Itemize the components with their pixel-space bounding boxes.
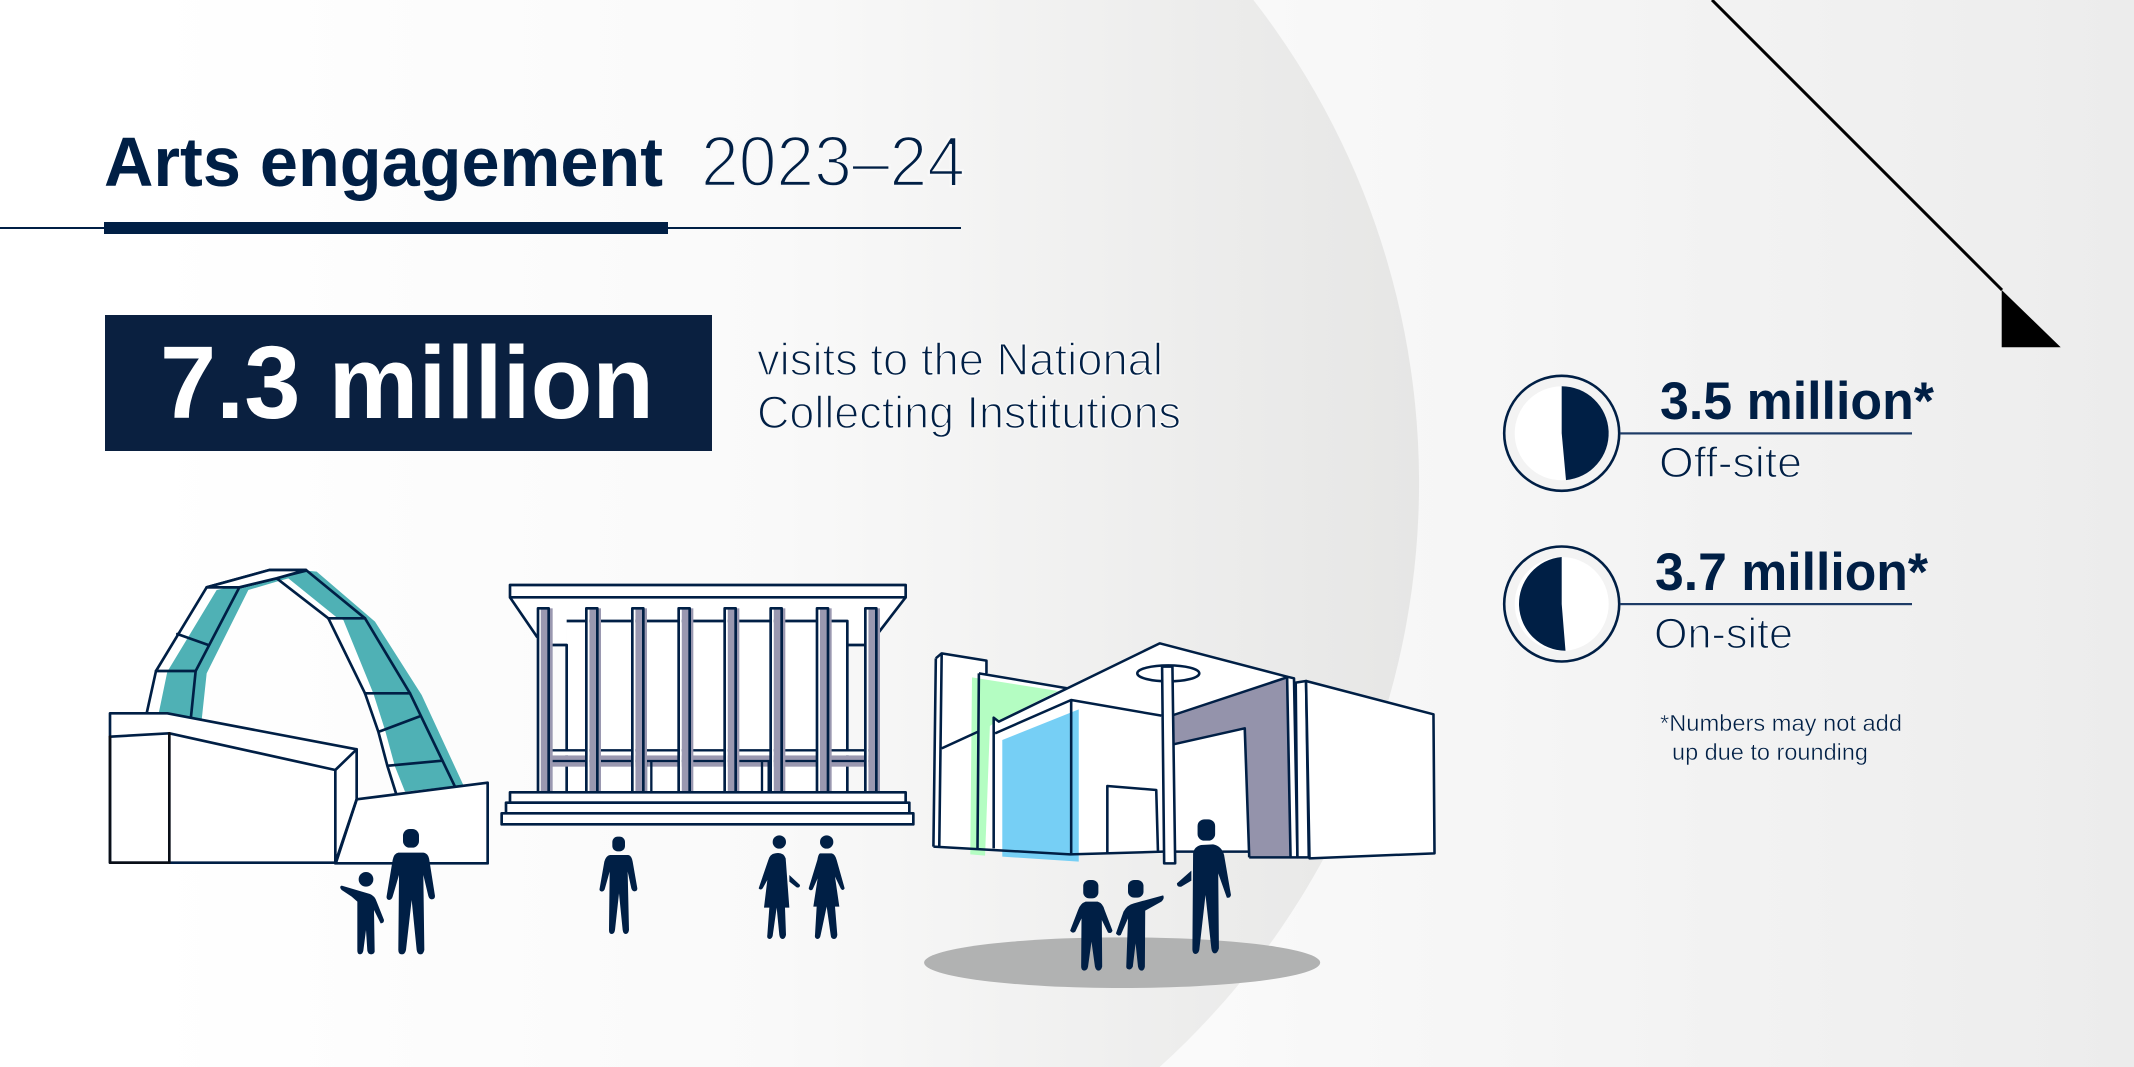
off-site stat: 3.5 million* [1660,372,1934,431]
off-site stat [1504,372,1934,491]
blue panel [1002,709,1079,862]
visitors [599,835,845,939]
illustration: modern gallery building with visitors [924,643,1435,988]
green panel [970,677,1058,856]
illustration: arch building with visitors [110,570,488,954]
headline stat box: 7.3 million [160,325,654,440]
on-site stat: On-site [1654,610,1793,658]
on-site stat [1504,543,1928,662]
headline description: visits to the National [757,334,1163,385]
title underline [0,222,961,234]
footnote [1660,710,1902,765]
icon: on-site pie [1504,546,1619,662]
title [104,123,965,202]
ground shadow [924,937,1320,988]
headline description [757,334,1181,438]
on-site stat: 3.7 million* [1655,543,1928,602]
visitors [340,829,435,954]
visitors [1070,819,1231,971]
columns [537,608,880,792]
footnote: up due to rounding [1672,739,1868,765]
footnote: *Numbers may not add [1660,710,1902,736]
icon: off-site pie [1504,376,1619,491]
purple panel [1173,677,1291,857]
title: Arts engagement [104,123,663,201]
headline description: Collecting Institutions [757,387,1181,438]
title: 2023–24 [701,123,965,202]
off-site stat: Off-site [1659,439,1802,487]
arrow [1712,0,2061,347]
illustration: columned building with visitors [502,585,913,939]
